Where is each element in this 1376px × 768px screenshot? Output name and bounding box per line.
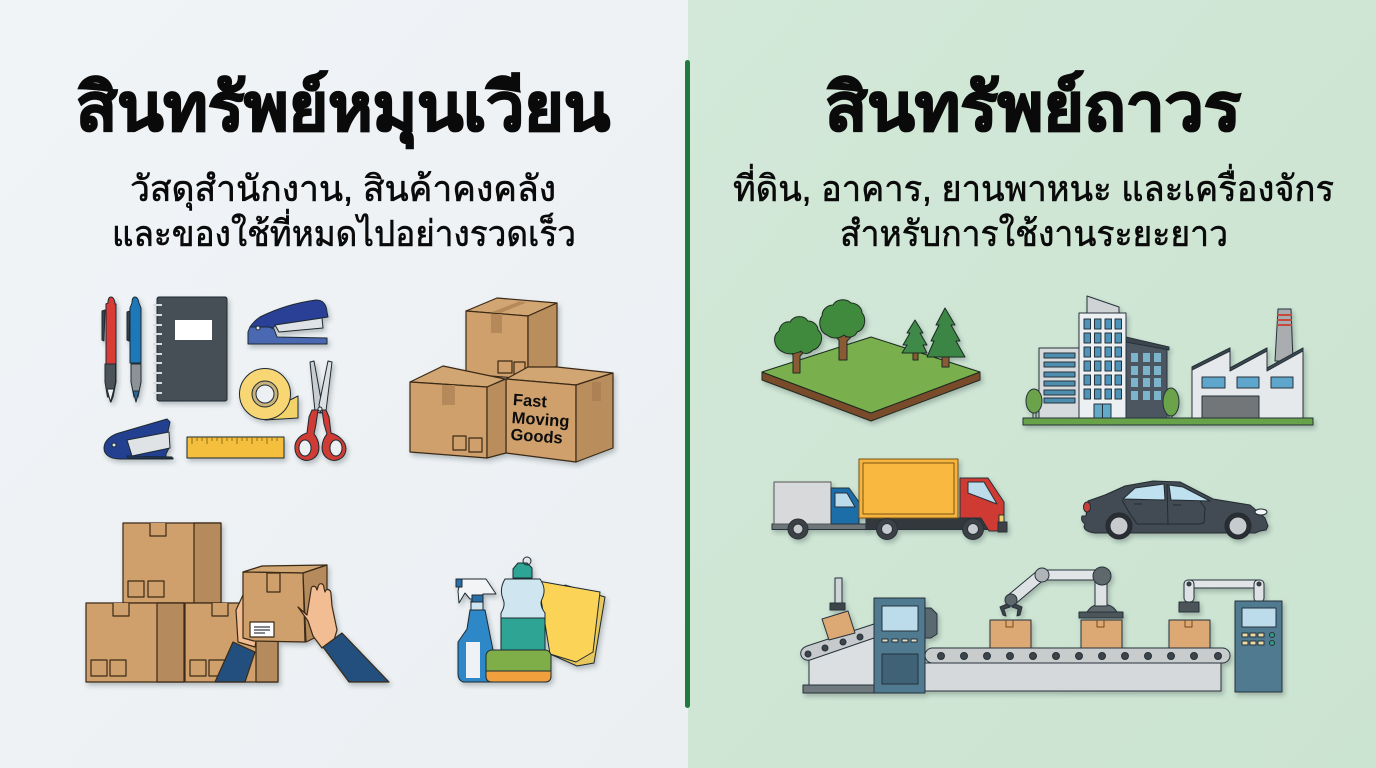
icon: scissors bbox=[295, 361, 346, 460]
detergent bottle bbox=[501, 557, 545, 654]
label: Fast Moving Goods: Goods bbox=[510, 426, 563, 448]
pine tree small bbox=[902, 320, 927, 360]
spray bottle bbox=[456, 579, 497, 682]
panel: current assets bbox=[76, 70, 613, 682]
control panel bbox=[1235, 601, 1282, 692]
tree 1 bbox=[775, 317, 822, 373]
presser bbox=[830, 578, 845, 610]
right sleeve bbox=[323, 633, 389, 682]
icon: fast moving goods boxes bbox=[410, 298, 613, 462]
icon: small box truck bbox=[772, 482, 867, 539]
yellow cloth bbox=[538, 581, 605, 666]
lower right box bbox=[185, 603, 278, 682]
ground strip bbox=[1023, 418, 1313, 425]
right hand bbox=[298, 584, 337, 648]
heading: fixed assets: สินทรัพย์ถาวร bbox=[825, 70, 1241, 144]
label: Fast Moving Goods bbox=[510, 391, 571, 448]
panel: fixed assets bbox=[733, 70, 1334, 693]
icon: large delivery truck bbox=[859, 459, 1007, 540]
description: fixed assets bbox=[733, 164, 1334, 254]
trees bbox=[1026, 388, 1179, 418]
center tower bbox=[1079, 313, 1126, 418]
chimney bbox=[1275, 309, 1293, 361]
icon: spiral notebook bbox=[153, 297, 227, 401]
label: Fast Moving Goods: Moving bbox=[511, 409, 570, 431]
panel: left background bbox=[0, 0, 688, 768]
land plot bbox=[762, 337, 980, 421]
icon: cleaning supplies bbox=[456, 557, 605, 682]
icon: ruler bbox=[187, 437, 284, 458]
control machine bbox=[874, 598, 937, 693]
icon: handheld stapler bbox=[104, 419, 173, 459]
main conveyor bbox=[925, 648, 1230, 691]
pine tree large bbox=[927, 308, 965, 367]
tree 2 bbox=[820, 300, 865, 360]
label: Fast Moving Goods: Fast bbox=[512, 391, 548, 411]
description: current assets bbox=[112, 168, 576, 254]
icon: office supplies bbox=[102, 297, 346, 460]
left sleeve bbox=[215, 642, 255, 682]
dark building bbox=[1126, 337, 1169, 418]
panel: right background bbox=[688, 0, 1376, 768]
incline conveyor bbox=[801, 611, 874, 693]
top box bbox=[123, 523, 221, 603]
divider between panels bbox=[685, 60, 690, 708]
left box bbox=[410, 366, 506, 458]
description: current assets: และของใช้ที่หมดไปอย่างรวดเร็ว bbox=[112, 209, 576, 254]
factory bbox=[1192, 348, 1303, 418]
sponge bbox=[486, 650, 551, 682]
top box bbox=[466, 298, 557, 379]
left hand bbox=[236, 595, 260, 647]
roof block bbox=[1087, 296, 1119, 313]
description: fixed assets: สำหรับการใช้งานระยะยาว bbox=[840, 213, 1228, 254]
icon: factory conveyor line bbox=[801, 567, 1282, 693]
icon: sedan car bbox=[1082, 481, 1268, 539]
left building bbox=[1039, 348, 1079, 418]
description: current assets: วัสดุสำนักงาน, สินค้าคงคลัง bbox=[130, 168, 556, 211]
icon: tape roll bbox=[240, 368, 298, 420]
icon: stacked boxes with hands bbox=[86, 523, 389, 682]
robot arm 2 bbox=[1179, 580, 1264, 612]
right box bbox=[506, 367, 613, 462]
description: fixed assets: ที่ดิน, อาคาร, ยานพาหนะ และเครื่องจักร bbox=[733, 164, 1334, 209]
icon: office buildings and factory bbox=[1023, 296, 1313, 425]
held box bbox=[243, 565, 327, 642]
icon: blue pen bbox=[127, 297, 141, 402]
lower left box bbox=[86, 603, 184, 682]
robot arm 1 bbox=[1000, 567, 1123, 618]
icon: red pen bbox=[102, 297, 116, 402]
icon: desktop stapler bbox=[248, 300, 328, 344]
boxes on conveyor bbox=[990, 620, 1210, 648]
icon: land with trees bbox=[762, 300, 980, 421]
heading: current assets: สินทรัพย์หมุนเวียน bbox=[76, 70, 610, 149]
